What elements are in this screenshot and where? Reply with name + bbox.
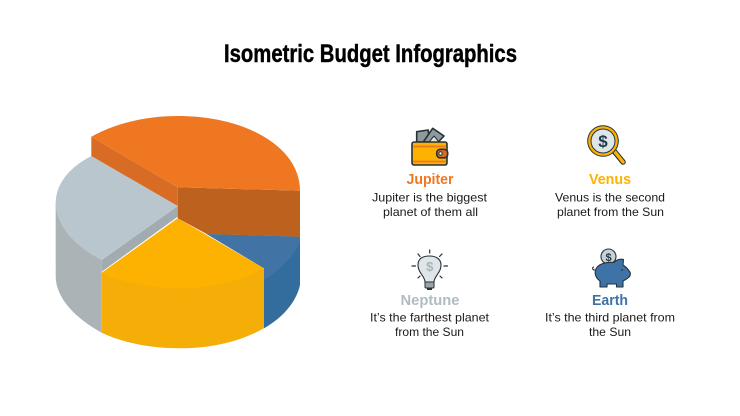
isometric pie chart (56, 116, 300, 348)
icon: light bulb with dollar: $ (426, 259, 434, 274)
icon: wallet with banknotes (412, 128, 448, 165)
icon: piggy bank with coin: $ (605, 252, 612, 264)
blue slice (207, 234, 300, 328)
item: Neptune (370, 250, 490, 339)
item: Neptune: from the Sun (395, 325, 464, 339)
heading: Neptune (400, 292, 460, 309)
description: Jupiter is the biggest (372, 191, 488, 205)
item: Earth: the Sun (589, 325, 631, 339)
heading: Jupiter (406, 171, 454, 188)
item: Venus: planet from the Sun (557, 205, 664, 219)
item: Jupiter: planet of them all (383, 205, 478, 219)
heading: Earth (592, 292, 628, 309)
description: It’s the third planet from (545, 311, 675, 325)
item: Earth (545, 249, 675, 339)
icon: magnifying glass with dollar: $ (598, 132, 608, 151)
grey slice (56, 156, 178, 333)
item: Jupiter (372, 128, 488, 219)
orange slice (91, 116, 300, 237)
heading: Venus (589, 171, 631, 188)
title: Isometric Budget Infographics (224, 40, 517, 68)
item: Venus (555, 126, 665, 219)
yellow slice (102, 218, 264, 348)
description: It’s the farthest planet (370, 311, 490, 325)
description: Venus is the second (555, 191, 665, 205)
